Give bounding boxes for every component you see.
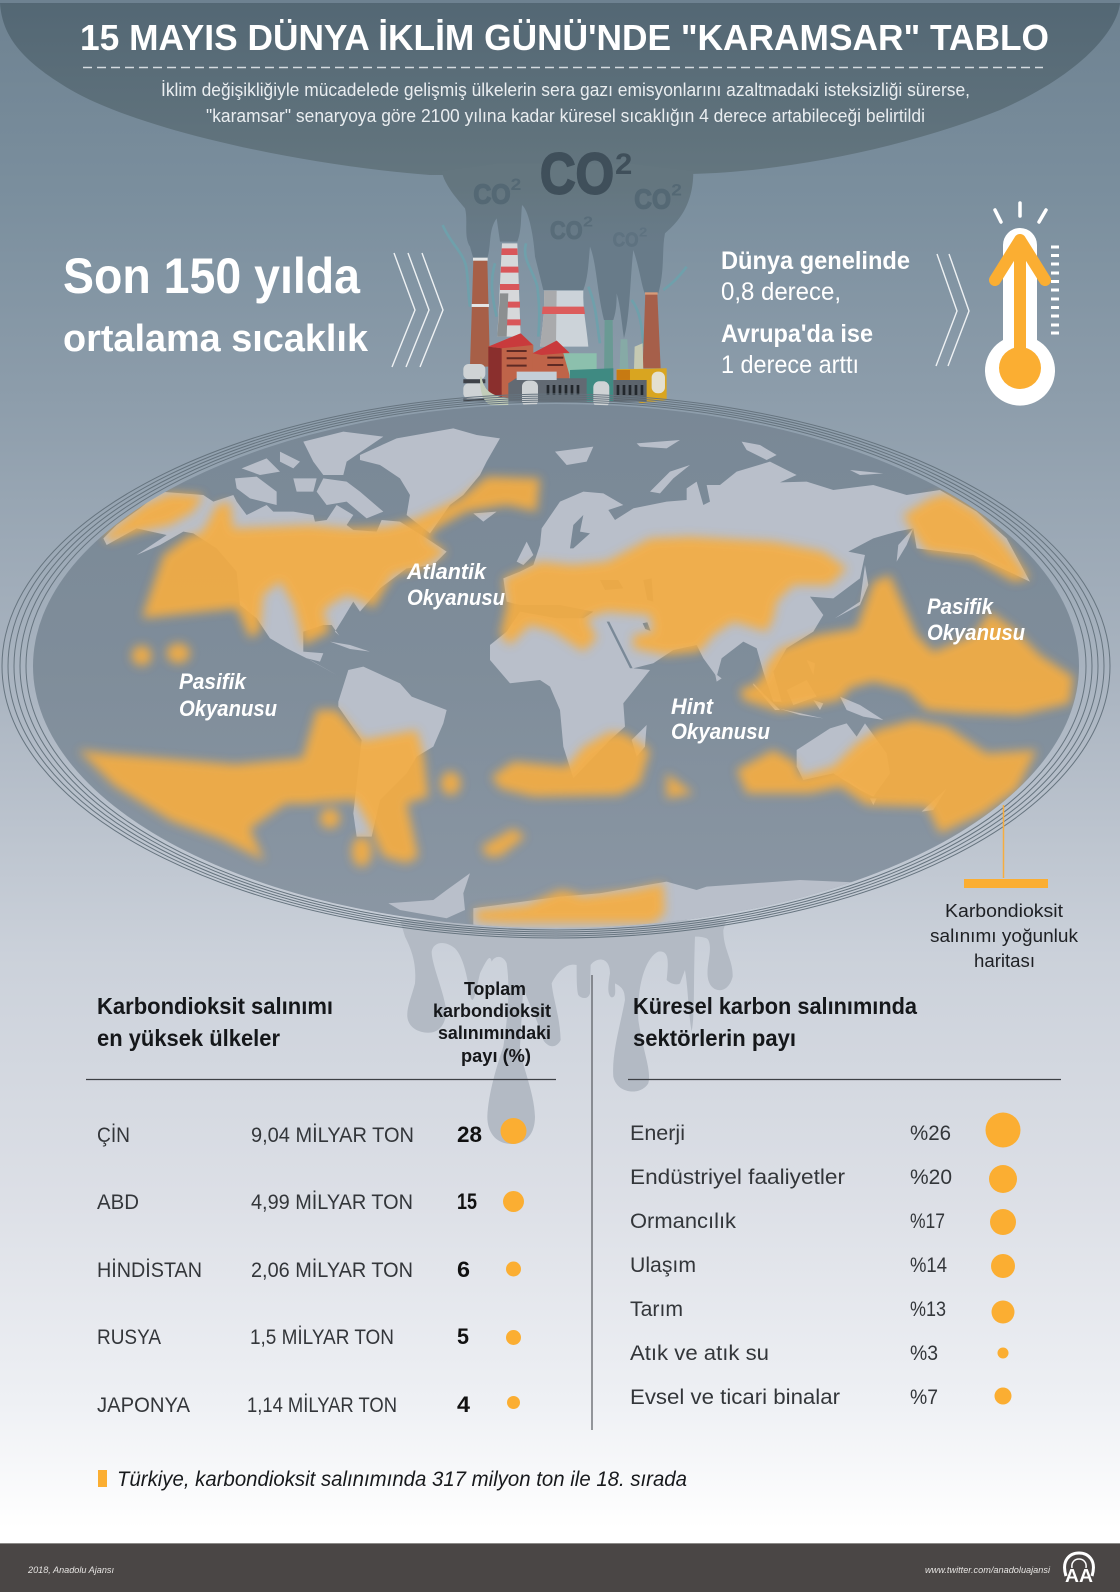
heat: carbon dioxide emission intensity [79, 477, 1073, 923]
ocean labels: Okyanusu [671, 719, 771, 744]
header cloud [0, 3, 1120, 175]
heading: sektörlerin payı [633, 1025, 796, 1051]
right statement text [721, 247, 910, 379]
map legend [930, 805, 1079, 971]
row: Tarım [630, 1298, 1014, 1324]
row: Rusya: 5 [457, 1324, 469, 1349]
row: Atık ve atık su [630, 1342, 1008, 1365]
heading [97, 993, 333, 1051]
right statement text: Dünya genelinde [721, 247, 910, 275]
arrow: chevrons right [936, 254, 969, 366]
subtitle [161, 80, 970, 126]
row: Hindistan: 2,06 MİLYAR TON [251, 1259, 413, 1282]
heading: Küresel karbon salınımında [633, 993, 917, 1019]
subtitle: "karamsar" senaryoya göre 2100 yılına kadar küresel sıcaklığın 4 derece artabileceği belirtildi [206, 106, 925, 126]
cooling tower [540, 291, 588, 347]
ocean labels [179, 559, 1026, 744]
row: ABD [97, 1189, 524, 1214]
map legend: salınımı yoğunluk [930, 926, 1079, 946]
row: Endüstriyel [630, 1165, 1017, 1193]
footnote: Türkiye, karbondioksit salınımında 317 milyon ton ile 18. sırada [117, 1468, 687, 1491]
column heading: salınımındaki [438, 1023, 551, 1043]
row: Japonya: 1,14 MİLYAR TON [247, 1394, 397, 1417]
subtitle: İklim değişikliğiyle mücadelede gelişmiş ülkelerin sera gazı emisyonlarını azaltmadaki isteksizliği sürerse, [161, 80, 970, 100]
row: Ormancılık: Ormancılık [630, 1210, 737, 1233]
right chimney [643, 293, 661, 368]
striped chimney [497, 243, 521, 337]
row: Evsel ve ticari binalar: Evsel ve ticari binalar [630, 1386, 840, 1409]
inland seas [570, 515, 653, 668]
left brick chimney [470, 261, 490, 367]
heading: Karbondioksit salınımı [97, 993, 333, 1019]
icon: agency logo [1065, 1553, 1093, 1586]
ocean labels: Okyanusu [407, 585, 506, 610]
CO2 labels: CO [540, 142, 614, 206]
right statement text: 1 derece arttı [721, 351, 859, 379]
row: Rusya [97, 1324, 521, 1349]
smoke plumes [442, 163, 693, 338]
ocean labels: Okyanusu [179, 696, 278, 721]
tanks [463, 364, 665, 407]
ocean labels: Pasifik [927, 594, 995, 619]
row: Enerji: %26 [910, 1122, 951, 1145]
icon: agency logo: AA [1065, 1566, 1093, 1586]
row: Çin: ÇİN [97, 1124, 130, 1147]
heading: Son 150 yılda: ortalama sıcaklık [63, 318, 369, 360]
row: Japonya [97, 1392, 520, 1417]
row: Atık ve atık su: %3 [910, 1342, 938, 1365]
CO2 labels: CO [473, 178, 511, 209]
footer bar: www.twitter.com/anadoluajansi [925, 1565, 1051, 1576]
row: Ulaşım [630, 1254, 1015, 1278]
CO2 labels: 2 [671, 181, 682, 200]
CO2 labels: 2 [639, 226, 647, 240]
column heading: karbondioksit [433, 1001, 551, 1021]
heading: en yüksek ülkeler [97, 1025, 280, 1051]
CO2 labels: CO [550, 218, 583, 245]
row: Çin: 28 [457, 1122, 482, 1147]
row: Ulaşım: %14 [910, 1254, 947, 1277]
row: ABD: 4,99 MİLYAR TON [251, 1191, 413, 1214]
CO2 labels: 2 [615, 148, 632, 181]
land masses [103, 428, 1030, 937]
ocean [33, 404, 1079, 928]
heading: Son 150 yılda: Son 150 yılda [63, 248, 361, 304]
row: ABD: 15 [457, 1189, 477, 1214]
row: Evsel ve ticari binalar [630, 1386, 1012, 1409]
steam [443, 225, 687, 347]
green stacks [604, 320, 613, 383]
CO2 labels [473, 142, 682, 251]
CO2 labels: 2 [511, 175, 521, 194]
CO2 labels: 2 [583, 215, 593, 231]
drips under the map [400, 920, 733, 1144]
row: Ormancılık: %17 [910, 1210, 945, 1233]
grey hall [508, 378, 587, 402]
row: Çin [97, 1118, 526, 1147]
row: Çin: 9,04 MİLYAR TON [251, 1124, 414, 1147]
row: Hindistan [97, 1257, 521, 1282]
red buildings [488, 333, 533, 398]
row: ABD: ABD [97, 1191, 139, 1214]
row: Hindistan: 6 [457, 1257, 470, 1282]
CO2 labels: CO [634, 184, 671, 215]
ocean labels: Hint [671, 694, 715, 719]
row: Atık ve atık su: Atık ve atık su [630, 1342, 769, 1365]
column heading [433, 979, 551, 1066]
footer bar: 2018, Anadolu Ajansı [27, 1565, 114, 1575]
row: Enerji [630, 1112, 1020, 1148]
row: Rusya: 1,5 MİLYAR TON [250, 1326, 394, 1349]
row: Tarım: %13 [910, 1298, 946, 1321]
map rings [2, 394, 1110, 938]
yellow plant [617, 368, 667, 403]
row: Rusya: RUSYA [97, 1326, 161, 1349]
CO2 labels: CO [613, 229, 639, 251]
arrow: chevrons left [392, 253, 443, 367]
row: Endüstriyel: %20 [910, 1166, 952, 1189]
row: Hindistan: HİNDİSTAN [97, 1259, 202, 1282]
dashed divider [83, 66, 1043, 68]
footer bar [0, 1543, 1120, 1592]
row: Japonya: JAPONYA [97, 1394, 190, 1417]
title: 15 MAYIS DÜNYA İKLİM GÜNÜ'NDE "KARAMSAR" TABLO [80, 17, 1049, 58]
icon: thermometer [985, 203, 1059, 406]
map legend: haritası [974, 951, 1035, 971]
panel: world map [33, 404, 1079, 937]
row: Japonya: 4 [457, 1392, 471, 1417]
column heading: Toplam [464, 979, 526, 999]
row: Ormancılık [630, 1209, 1016, 1235]
ocean labels: Okyanusu [927, 620, 1026, 645]
row: Endüstriyel: Endüstriyel faaliyetler [630, 1166, 845, 1189]
map legend: Karbondioksit [945, 901, 1063, 921]
row: Enerji: Enerji [630, 1122, 685, 1145]
heading [633, 993, 917, 1051]
factory illustration [442, 142, 693, 407]
panel: sector shares [628, 993, 1061, 1409]
heading: Son 150 yılda [63, 248, 369, 360]
column heading: payı (%) [461, 1046, 531, 1066]
panel: highest emitting countries [86, 979, 556, 1417]
row: Tarım: Tarım [630, 1298, 683, 1321]
row: Evsel ve ticari binalar: %7 [910, 1386, 938, 1409]
right statement text: Avrupa'da ise [721, 320, 873, 348]
teal plant [563, 353, 597, 377]
ocean labels: Atlantik [406, 559, 488, 584]
row: Ulaşım: Ulaşım [630, 1254, 696, 1277]
right statement text: 0,8 derece, [721, 278, 841, 306]
ocean labels: Pasifik [179, 669, 248, 694]
